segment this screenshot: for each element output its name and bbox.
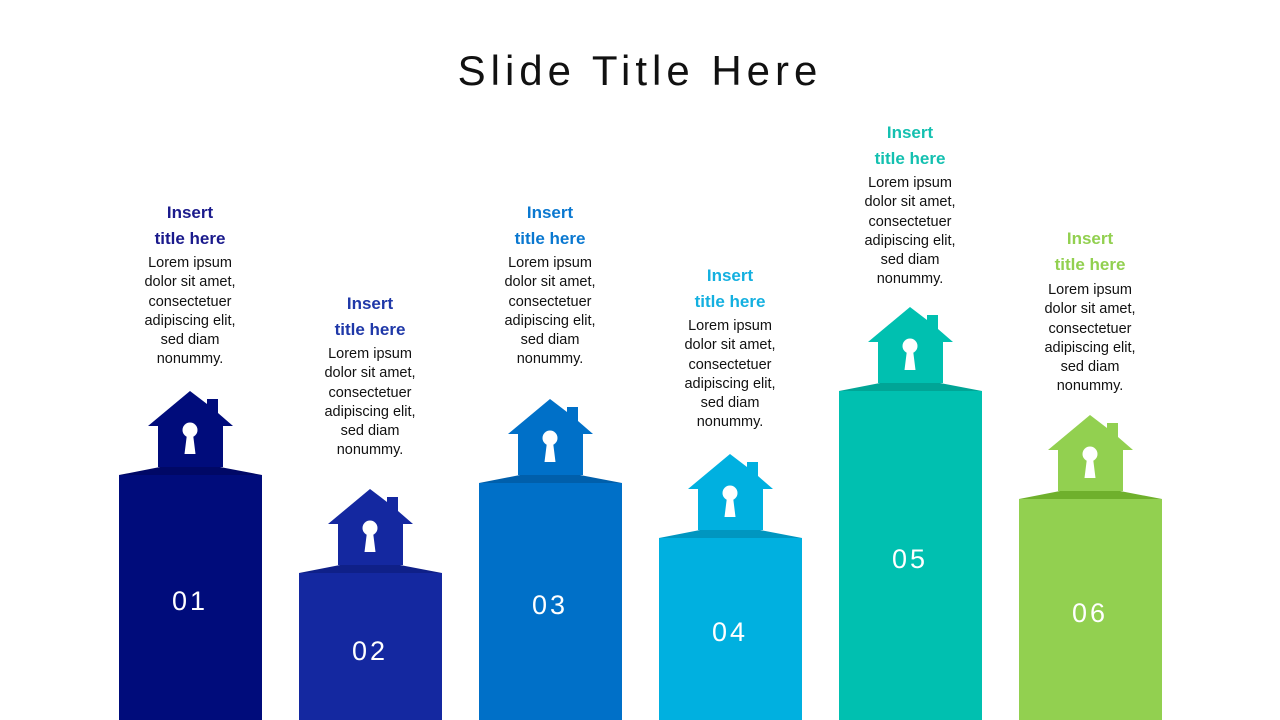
text 06: adipiscing elit, [1044,340,1136,356]
text 02: adipiscing elit, [324,404,416,420]
text 05: adipiscing elit, [864,233,956,249]
text 03: nonummy. [517,351,583,367]
text 04: nonummy. [697,414,763,430]
number 01: 01 [172,586,208,616]
text 04: adipiscing elit, [684,376,776,392]
bar 06 [1019,415,1162,720]
bar 01 [119,391,262,720]
bar 02 [299,489,442,720]
bar 04 [659,454,802,720]
text 03: adipiscing elit, [504,313,596,329]
text 02: title here [335,320,405,339]
text 02: dolor sit amet, [324,365,416,381]
title: Slide Title Here [458,47,822,94]
text 04: title here [695,292,765,311]
text 04 [684,266,776,430]
text 03: title here [515,229,585,248]
text 06 [1044,229,1136,394]
text 01: Insert [167,203,213,222]
text 03: Lorem ipsum [508,255,592,271]
column 05 [839,123,982,720]
text 06: title here [1055,255,1125,274]
text 05: dolor sit amet, [864,194,956,210]
column 01 [119,203,262,720]
text 03: Insert [527,203,573,222]
text 02 [324,294,416,458]
bar 03 [479,399,622,720]
text 02: sed diam [341,423,399,439]
column 03 [479,203,622,720]
number 02: 02 [352,636,388,666]
text 01: Lorem ipsum [148,255,232,271]
text 04: consectetuer [688,357,772,373]
text 01 [144,203,236,367]
text 02: consectetuer [328,385,412,401]
column 06 [1019,229,1162,720]
text 05: nonummy. [877,271,943,287]
text 01: consectetuer [148,294,232,310]
text 06: Insert [1067,229,1113,248]
number 06: 06 [1072,598,1108,628]
text 05: title here [875,149,945,168]
text 06: dolor sit amet, [1044,301,1136,317]
number 05: 05 [892,544,928,574]
text 04: sed diam [701,395,759,411]
column 04 [659,266,802,720]
text 04: Insert [707,266,753,285]
text 06: nonummy. [1057,378,1123,394]
text 06: Lorem ipsum [1048,282,1132,298]
text 02: nonummy. [337,442,403,458]
text 03: dolor sit amet, [504,274,596,290]
text 06: sed diam [1061,359,1119,375]
text 03 [504,203,596,367]
text 01: nonummy. [157,351,223,367]
text 01: sed diam [161,332,219,348]
text 04: Lorem ipsum [688,318,772,334]
text 02: Insert [347,294,393,313]
text 01: title here [155,229,225,248]
text 05: Insert [887,123,933,142]
text 06: consectetuer [1048,321,1132,337]
text 03: sed diam [521,332,579,348]
text 03: consectetuer [508,294,592,310]
text 05: Lorem ipsum [868,175,952,191]
text 05: consectetuer [868,214,952,230]
text 01: adipiscing elit, [144,313,236,329]
text 01: dolor sit amet, [144,274,236,290]
column 02 [299,294,442,720]
number 03: 03 [532,590,568,620]
text 05 [864,123,956,287]
text 05: sed diam [881,252,939,268]
text 04: dolor sit amet, [684,337,776,353]
bar 05 [839,307,982,720]
text 02: Lorem ipsum [328,346,412,362]
number 04: 04 [712,617,748,647]
